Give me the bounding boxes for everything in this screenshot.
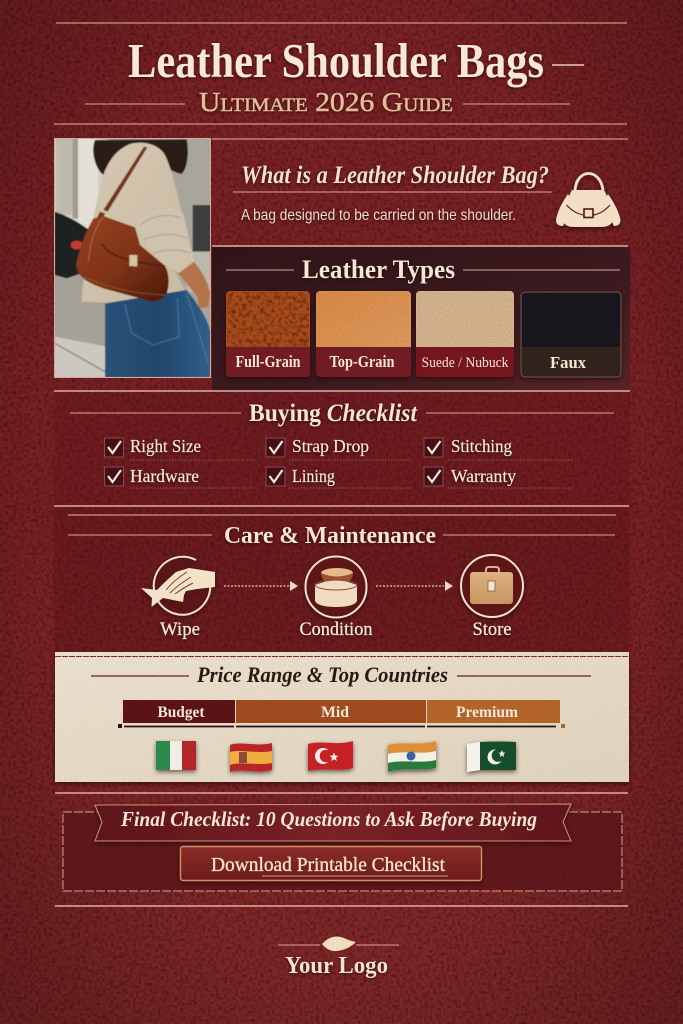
logo text: Your Logo xyxy=(285,952,388,979)
segment: mid: Mid xyxy=(321,704,349,721)
header xyxy=(54,23,627,124)
price heading: Price Range & Top Countries xyxy=(196,662,448,687)
label: wipe: Wipe xyxy=(160,619,200,640)
panel: care and maintenance xyxy=(54,506,630,651)
icon: condition jar xyxy=(306,556,366,618)
check item: strap drop xyxy=(266,436,411,460)
icon: leaf xyxy=(322,936,356,951)
check item: warranty: Warranty xyxy=(451,466,516,486)
segment: premium xyxy=(427,700,560,723)
panel: buying checklist xyxy=(54,391,630,506)
flag: turkey xyxy=(308,741,353,771)
what is text: A bag designed to be carried on the shoulder. xyxy=(241,207,516,224)
segment: budget xyxy=(123,700,235,723)
flag: india xyxy=(388,741,436,772)
card: suede / nubuck xyxy=(416,291,514,377)
icon: store briefcase xyxy=(461,555,523,617)
button xyxy=(180,846,482,880)
check item: stitching: Stitching xyxy=(451,436,512,456)
segment: budget: Budget xyxy=(158,704,205,721)
panel: price range and countries xyxy=(55,652,629,782)
flag: italy xyxy=(156,741,196,770)
care heading: Care & Maintenance xyxy=(224,522,436,549)
arrow: condition to store xyxy=(376,581,453,591)
hair xyxy=(93,139,188,176)
ribbon text: Final Checklist: 10 Questions to Ask Before Buying xyxy=(120,807,537,831)
photo: woman with shoulder bag xyxy=(54,138,211,378)
card: suede / nubuck: Suede / Nubuck xyxy=(422,355,509,371)
card: faux: Faux xyxy=(550,353,586,372)
arrow: wipe to condition xyxy=(224,581,298,591)
flag: pakistan xyxy=(467,742,516,772)
card: faux xyxy=(521,292,621,377)
checklist heading: Buying Checklist xyxy=(249,398,418,427)
panel: leather types xyxy=(212,246,630,391)
label: condition: Condition xyxy=(300,619,373,640)
icon: wipe xyxy=(141,557,215,615)
check item: hardware xyxy=(104,466,254,488)
panel: what is xyxy=(212,139,628,227)
subtitle: Ultimate 2026 Guide xyxy=(199,87,453,117)
check item: right size xyxy=(104,436,254,460)
check item: right size: Right Size xyxy=(130,436,201,456)
what is heading: What is a Leather Shoulder Bag? xyxy=(241,162,549,189)
check item: warranty xyxy=(424,466,574,488)
segment: mid xyxy=(236,700,426,723)
check item: strap drop: Strap Drop xyxy=(292,436,369,456)
ribbon banner xyxy=(95,804,571,841)
check item: lining xyxy=(266,466,411,488)
price bar xyxy=(118,700,565,728)
check item: lining: Lining xyxy=(292,466,335,486)
button: Download Printable Checklist xyxy=(211,854,445,876)
card: full-grain xyxy=(226,291,310,377)
flag: spain xyxy=(230,743,272,772)
card: full-grain: Full-Grain xyxy=(236,352,300,371)
stitched box xyxy=(63,812,622,891)
panel: final checklist xyxy=(55,793,628,906)
label: store: Store xyxy=(472,619,512,640)
leather types heading: Leather Types xyxy=(302,255,455,284)
logo xyxy=(278,936,399,979)
check item: hardware: Hardware xyxy=(130,466,199,486)
check item: stitching xyxy=(424,436,574,460)
card: top-grain: Top-Grain xyxy=(330,352,394,371)
title: Leather Shoulder Bags xyxy=(128,33,544,88)
card: top-grain xyxy=(316,291,411,377)
segment: premium: Premium xyxy=(456,704,519,721)
icon: handbag xyxy=(556,174,620,227)
